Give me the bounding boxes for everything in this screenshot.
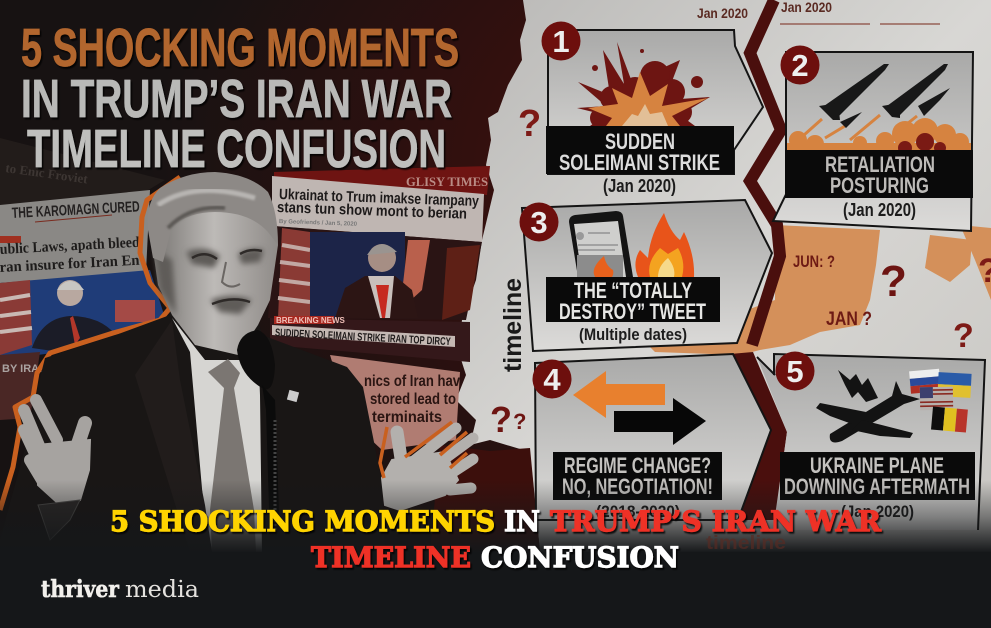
number badge 1: 1: [552, 24, 570, 59]
caption line 1: [110, 505, 882, 538]
title: 5 SHOCKING MOMENTS: [21, 18, 459, 78]
panel 1: Soleimani strike: [542, 22, 763, 196]
question marks and date scribbles: ?: [880, 257, 907, 306]
logo: [41, 576, 199, 603]
panel 3: totally destroy tweet: [520, 200, 772, 351]
maroon lower strip behind panels: [430, 445, 540, 552]
heading bar 3: THE “TOTALLY: [574, 278, 692, 303]
date 4: (2018-2020): [596, 502, 680, 521]
date 3: (Multiple dates): [579, 325, 687, 344]
heading bar 4: NO, NEGOTIATION!: [562, 474, 713, 499]
caption line 1: 5 SHOCKING MOMENTS: [110, 505, 495, 538]
number badge 2: 2: [791, 48, 809, 83]
heading bar 4: REGIME CHANGE?: [564, 453, 711, 478]
tie: [208, 359, 256, 552]
lapel pin: [287, 390, 299, 402]
heading bar 1: SOLEIMANI STRIKE: [559, 150, 720, 175]
explosion icon: [577, 42, 710, 128]
eye and mouth lines: [192, 250, 262, 304]
orange paint patches: [648, 225, 991, 355]
orange hand accent: [380, 422, 467, 478]
heading bar 2: RETALIATION: [825, 152, 935, 177]
headline clipping: By Geofriends / Jan 5, 2020: [279, 219, 358, 228]
logo: media: [125, 577, 199, 603]
grey paper headline: ran insure for Iran En: [0, 253, 141, 276]
headline clipping: Ukrainat to Trum imakse Irampany: [279, 186, 480, 210]
heading bar 5: UKRAINE PLANE: [810, 453, 944, 478]
orange cutout outline: [0, 177, 180, 510]
number badge 4: [532, 360, 572, 398]
dark newspaper scrap: [0, 138, 165, 208]
right newspaper collage: [268, 166, 490, 450]
blue TV image: [0, 270, 165, 360]
footer band: [0, 552, 991, 628]
number badge 4: 4: [543, 362, 561, 397]
red masthead: GLISY TIMES: [406, 174, 488, 189]
question marks and date scribbles: JAN ?: [826, 309, 872, 330]
heading bar 3: DESTROY” TWEET: [559, 299, 706, 324]
timeline vertical label: timeline: [499, 278, 527, 372]
pink paper clipping: stored lead to: [370, 391, 456, 408]
pink paper clipping: terminaits: [372, 409, 442, 426]
heading bar 1: [546, 126, 734, 175]
lapel shadow: [135, 320, 212, 552]
breaking news bar: SUDIDEN SOLEIMANI STRIKE IRAN TOP DIRCY: [275, 327, 452, 348]
headline clipping: [272, 176, 484, 242]
headline clipping: stans tun show mont to berian: [277, 199, 467, 223]
hair: [148, 172, 278, 262]
breaking news bar: BREAKING NEWS: [276, 316, 346, 325]
caption line 2: [311, 541, 679, 574]
orange left arrow: [573, 371, 665, 418]
number badge 5: 5: [786, 354, 804, 389]
number badge 1: [542, 22, 580, 60]
date 5: (Jan 2020): [841, 502, 914, 521]
face shading: [155, 249, 264, 315]
red masthead: [274, 166, 490, 195]
caption line 1: IN: [504, 505, 540, 538]
lower caption: BY IRAN: [2, 363, 47, 375]
caption line 2: TIMELINE: [311, 541, 471, 574]
caption: [110, 505, 882, 574]
title: TIMELINE CONFUSION: [27, 119, 446, 179]
number badge 5: [776, 352, 814, 390]
faint timeline word: timeline: [706, 533, 786, 554]
microphone: [237, 330, 280, 540]
heading bar 2: POSTURING: [830, 173, 929, 198]
shirt: [172, 318, 262, 552]
grey paper headline: [0, 190, 150, 283]
dark newspaper scrap: to Enic Froviet: [5, 160, 89, 187]
plane icon: [816, 370, 920, 442]
suit: [0, 315, 385, 552]
breaking news bar: [270, 316, 470, 362]
date labels: [697, 0, 832, 21]
question marks and date scribbles: ?: [518, 103, 541, 145]
grey paper headline: THE KAROMAGN CURED: [11, 198, 140, 222]
phone icon: [569, 211, 633, 277]
heading bar 4: [553, 452, 722, 500]
heading bar 5: [780, 452, 975, 500]
left newspaper collage: [0, 138, 165, 420]
left hand: [24, 400, 90, 540]
number badge 3: 3: [530, 205, 548, 240]
caption line 2: CONFUSION: [481, 541, 679, 574]
pink paper clipping: nics of Iran hav: [364, 373, 460, 390]
heading bar 2: [785, 150, 973, 198]
question marks and date scribbles: ?: [513, 409, 526, 434]
right hand: [382, 428, 473, 510]
question marks and date scribbles: [490, 103, 991, 440]
missiles icon: [787, 64, 971, 155]
black right arrow: [614, 398, 706, 445]
number badge 3: [520, 202, 558, 242]
heading bar 3: [546, 277, 720, 324]
pink paper clipping: [330, 355, 460, 450]
Trump figure: [0, 172, 473, 552]
heading bar 1: SUDDEN: [605, 129, 675, 154]
panel 2: retaliation posturing: [773, 46, 973, 231]
torn paper background: [456, 0, 991, 552]
date 1: (Jan 2020): [603, 176, 676, 196]
panel 5: Ukraine plane: [757, 352, 985, 530]
question marks and date scribbles: ?: [953, 317, 974, 355]
number badge 2: [780, 46, 820, 84]
grey paper headline: ublic Laws, apath bleed: [0, 235, 141, 258]
title: [21, 18, 459, 179]
question marks and date scribbles: ?: [490, 399, 512, 440]
central crack: [730, 0, 787, 520]
date 2: (Jan 2020): [843, 200, 916, 220]
bottom fade: [0, 480, 991, 553]
date label left: Jan 2020: [697, 5, 748, 21]
question marks and date scribbles: JUN: ?: [793, 252, 835, 271]
flame icon: [635, 213, 694, 277]
panel 4: regime change: [532, 354, 771, 521]
title: IN TRUMP’S IRAN WAR: [21, 69, 452, 129]
caption line 1: TRUMP’S IRAN WAR: [550, 505, 882, 538]
flags: [909, 369, 972, 433]
logo: thriver: [41, 576, 120, 603]
TV image: [268, 226, 482, 320]
lower caption: [0, 352, 47, 420]
head: [148, 172, 278, 355]
